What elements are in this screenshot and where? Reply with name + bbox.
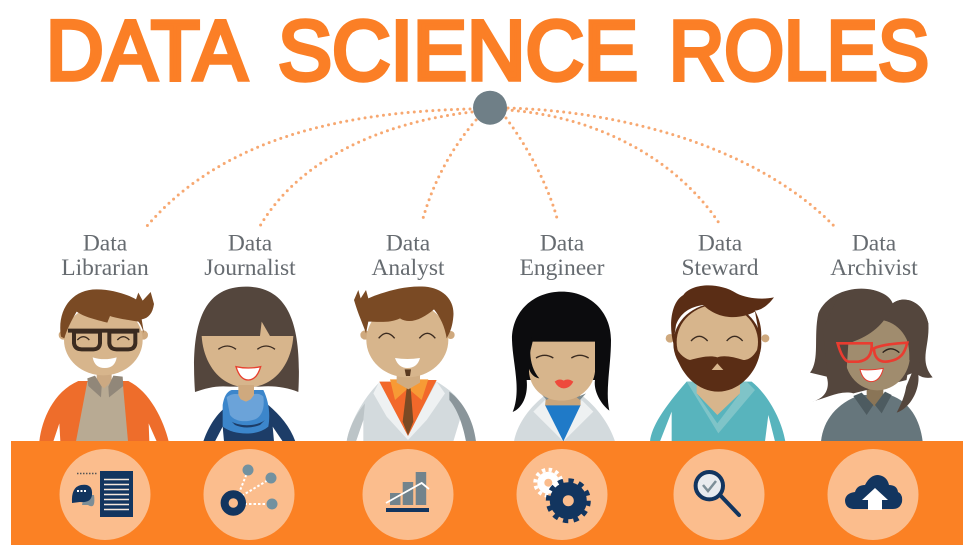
orange base band bbox=[11, 441, 963, 545]
person: archivist bbox=[810, 289, 933, 441]
hub circle bbox=[473, 91, 507, 125]
role label: Data Archivist: Data bbox=[852, 230, 897, 256]
role label: Data Librarian: Librarian bbox=[61, 255, 149, 281]
icon: network nodes bbox=[204, 449, 294, 540]
title: SCIENCE bbox=[278, 4, 638, 98]
dotted connectors from hub to roles bbox=[147, 108, 834, 226]
icon: bar chart bbox=[362, 449, 454, 540]
title bbox=[46, 4, 929, 98]
person: steward bbox=[650, 285, 785, 441]
icon: gears bbox=[516, 449, 608, 540]
role label: Data Analyst: Data bbox=[386, 230, 431, 256]
person: analyst bbox=[347, 286, 476, 441]
role label: Data Journalist: Journalist bbox=[204, 255, 296, 281]
role label: Data Archivist: Archivist bbox=[830, 255, 918, 281]
role label: Data Steward: Steward bbox=[681, 255, 759, 281]
person: librarian bbox=[39, 289, 169, 441]
person: engineer bbox=[512, 292, 615, 441]
title: DATA bbox=[46, 4, 247, 98]
icon: documents and chat bbox=[60, 449, 150, 540]
icon: cloud upload bbox=[828, 449, 918, 540]
role label: Data Steward: Data bbox=[698, 230, 743, 256]
role label: Data Engineer: Data bbox=[540, 230, 585, 256]
role label: Data Engineer: Engineer bbox=[520, 255, 605, 281]
role label: Data Journalist: Data bbox=[228, 230, 273, 256]
person: journalist bbox=[194, 287, 299, 441]
title: ROLES bbox=[669, 4, 929, 98]
role label: Data Analyst: Analyst bbox=[371, 255, 445, 281]
icon: magnifier with check bbox=[674, 449, 764, 540]
role label: Data Librarian: Data bbox=[83, 230, 128, 256]
